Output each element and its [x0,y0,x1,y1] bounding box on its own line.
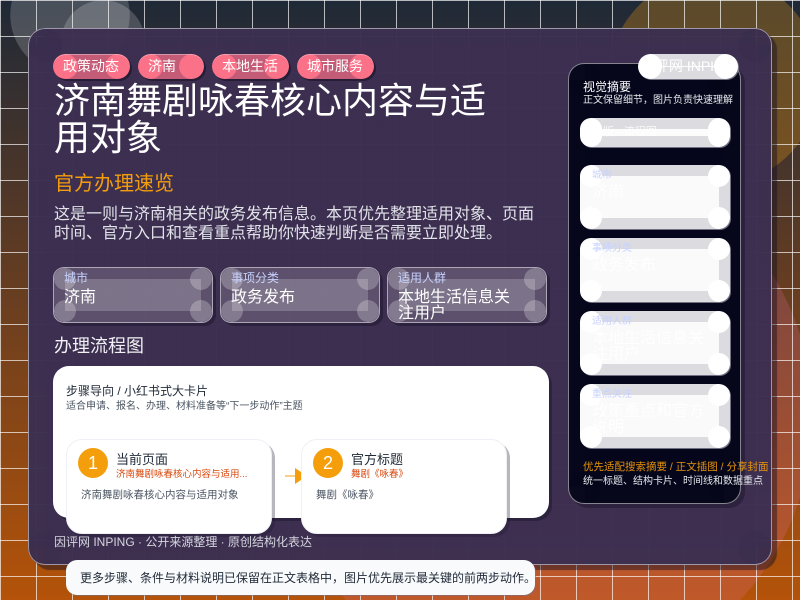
step 2 title: 官方标题 [351,452,403,467]
metric card: 适用人群 [387,267,547,323]
step card 2 [301,439,507,534]
section heading: 办理流程图: 办理流程图 [54,336,144,356]
metric card: 城市: 城市 [64,271,88,285]
step card 1 [66,439,272,534]
tag: 济南: 济南 [148,58,176,74]
flow card subtitle: 适合申请、报名、办理、材料准备等“下一步动作”主题 [66,401,303,412]
tag: 政策动态: 政策动态 [63,58,119,74]
metric card: 适用人群: 本地生活信息关注用户 [398,289,510,322]
tags row [53,54,376,81]
white card: 重点关注 [580,384,730,448]
footer source line: 因评网 INPING · 公开来源整理 · 原创结构化表达 [54,535,312,549]
bottom note pill: 更多步骤、条件与材料说明已保留在正文表格中，图片优先展示最关键的前两步动作。 [80,571,536,585]
step number 2: 2 [323,453,333,473]
white card: 城市: 济南 [592,184,624,201]
panel: visual summary phone [568,63,741,504]
step 2 body: 舞剧《咏春》 [316,489,379,501]
step number 1: 1 [88,453,98,473]
background circle: amber top-right [608,0,800,186]
white card: 重点关注: 重点关注 [592,389,632,400]
white card: 重点关注: 政策重点和官方说明 [592,403,704,436]
metric card: 城市 [53,267,213,323]
summary heading: 视觉摘要 [583,80,631,94]
white card: 适用人群: 适用人群 [592,316,632,327]
metric card: 事项分类: 政务发布 [231,289,295,306]
white pill: 竖版 流程图 [580,118,730,147]
background circle: pink bottom [273,146,800,600]
background circle: white top-left [10,0,130,75]
flow card title: 步骤导向 / 小红书式大卡片 [66,384,208,398]
step 1 title: 当前页面 [116,452,168,467]
summary subheading: 正文保留细节，图片负责快速理解 [583,95,733,106]
step 1 body: 济南舞剧咏春核心内容与适用对象 [81,489,238,501]
summary note: amber: 优先适配搜索摘要 / 正文插图 / 分享封面 [583,461,769,473]
subtitle: 官方办理速览 [54,173,174,195]
brand pill [638,54,738,79]
summary note: grey: 统一标题、结构卡片、时间线和数据重点 [583,476,763,487]
white card: 城市: 城市 [592,170,612,181]
step number 2 [313,448,343,478]
white card: 城市 [580,165,730,228]
metric card: 城市: 济南 [64,289,96,306]
flow card [53,366,549,518]
white card: 适用人群 [580,311,730,374]
title: 济南舞剧咏春核心内容与适 [54,80,486,121]
bottom note pill [66,560,535,595]
tag: 城市服务: 城市服务 [307,58,363,74]
title [54,80,486,158]
arrow between steps [285,468,301,484]
metric card: 适用人群: 适用人群 [398,271,446,285]
background circle: white small top-left [61,0,145,84]
white card: 适用人群: 本地生活信息关注用户 [592,330,704,363]
white card: 事项分类: 事项分类 [592,243,632,254]
pill label: 竖版 · 流程图 [592,126,657,138]
tag: 本地生活: 本地生活 [222,58,278,74]
description text: 时间、官方入口和查看重点帮助你快速判断是否需要立即处理。 [54,225,502,242]
brand pill: 因评网 INPING [641,58,735,74]
step number 1 [78,448,108,478]
tag: 城市服务 [297,54,374,79]
title: 用对象 [54,117,162,158]
step 1 subtitle: 济南舞剧咏春核心内容与适用... [116,469,247,480]
metric card: 事项分类: 事项分类 [231,271,279,285]
white card: 事项分类 [580,238,730,302]
tag: 政策动态 [53,54,130,79]
description text [54,205,534,242]
tag: 本地生活 [212,54,289,79]
metric card: 事项分类 [220,267,380,323]
step 2 subtitle: 舞剧《咏春》 [351,469,408,480]
description text: 这是一则与济南相关的政务发布信息。本页优先整理适用对象、页面 [54,206,534,223]
tag: 济南 [138,54,204,79]
white card: 事项分类: 政务发布 [592,257,656,274]
